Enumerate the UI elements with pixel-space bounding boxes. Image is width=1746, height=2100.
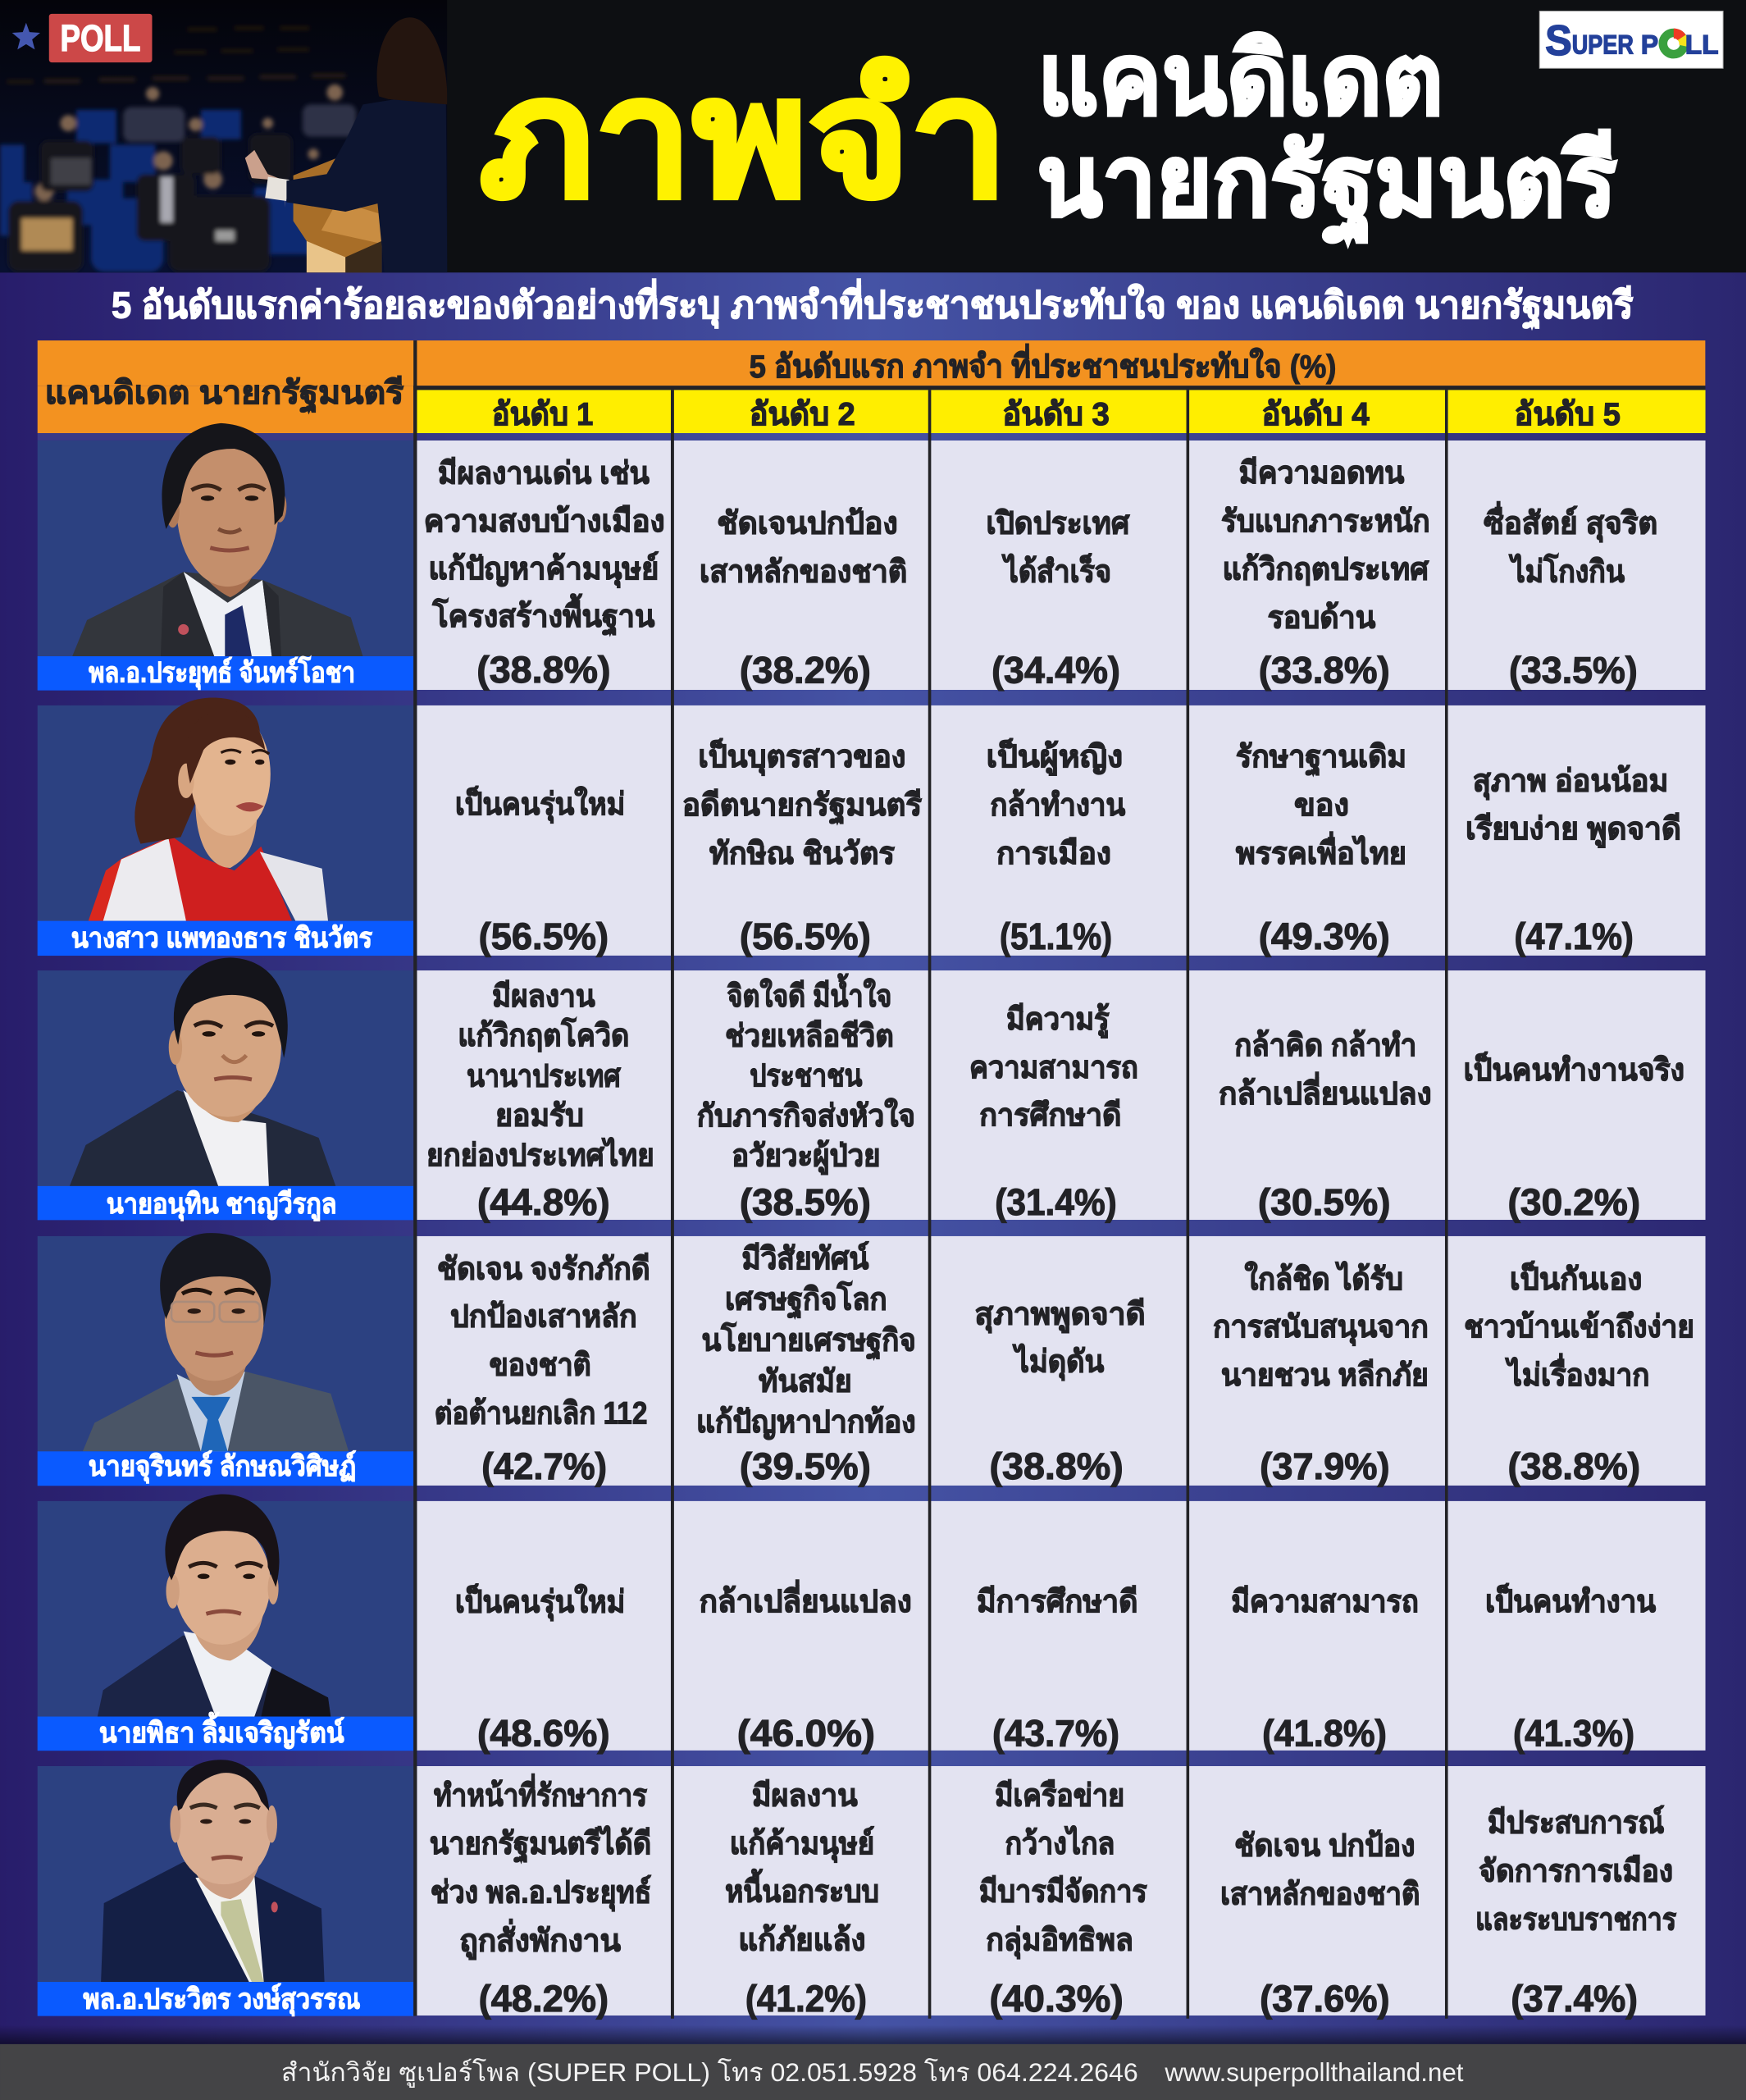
cell rank 2: กล้าเปลี่ยนแปลง [700, 1579, 912, 1618]
cell rank 4: มีความสามารถ [1231, 1584, 1419, 1618]
header: top five: 5 อันดับแรก ภาพจำ ที่ประชาชนประทับใจ (%) [750, 344, 1336, 385]
cell rank 3 [986, 505, 1130, 692]
cell rank 2: ทักษิณ ชินวัตร [709, 836, 895, 870]
cell rank 2: (56.5%) [740, 915, 871, 957]
cell rank 2: แก้ภัยแล้ง [738, 1922, 866, 1956]
cell rank 5: ชาวบ้านเข้าถึงง่าย [1464, 1309, 1694, 1344]
cell rank 2: เสาหลักของชาติ [700, 555, 907, 589]
cell rank 1 [426, 979, 654, 1223]
cell rank 3: (40.3%) [990, 1978, 1124, 2020]
cell rank 4: (41.8%) [1262, 1713, 1387, 1755]
logo: super poll: P [1641, 29, 1658, 59]
cell rank 2: อวัยวะผู้ป่วย [732, 1139, 880, 1176]
cell rank 3: กลุ่มอิทธิพล [986, 1922, 1133, 1959]
cell rank 4 [1213, 1261, 1429, 1487]
footer: www.superpollthailand.net [1164, 2058, 1464, 2087]
cell rank 2 [682, 737, 922, 957]
cell rank 1: (44.8%) [477, 1181, 610, 1223]
cell rank 4 [1220, 1828, 1420, 2020]
cell rank 1: ยอมรับ [495, 1098, 584, 1133]
cell rank 5: (30.2%) [1508, 1181, 1640, 1223]
cell rank 1: (48.6%) [477, 1713, 610, 1755]
subtitle: 5 อันดับแรกค่าร้อยละของตัวอย่างที่ระบุ ภาพจำที่ประชาชนประทับใจ ของ แคนดิเดต นายกรัฐมนตรี [112, 278, 1634, 329]
cell rank 1: โครงสร้างพื้นฐาน [431, 593, 655, 636]
name bar: พล.อ.ประยุทธ์ จันทร์โอชา [89, 656, 355, 691]
row 5 [38, 1495, 1656, 1755]
header: rank labels: อันดับ 1 [492, 397, 593, 432]
cell rank 2: เป็นบุตรสาวของ [698, 737, 906, 776]
cell rank 2: อดีตนายกรัฐมนตรี [682, 788, 922, 824]
cell rank 3: สุภาพพูดจาดี [975, 1297, 1146, 1334]
footer: สำนักวิจัย ซูเปอร์โพล (SUPER POLL) โทร 02.051.5928 โทร 064.224.2646 [281, 2058, 1138, 2088]
cell rank 3: มีการศึกษาดี [977, 1584, 1137, 1618]
portrait: pita [98, 1495, 331, 1717]
cell rank 3: (38.8%) [990, 1445, 1124, 1487]
cell rank 4: (30.5%) [1258, 1181, 1391, 1223]
cell rank 1 [424, 455, 665, 691]
name bar: นายพิธา ลิ้มเจริญรัตน์ [99, 1712, 344, 1750]
cell rank 5: มีประสบการณ์ [1488, 1805, 1664, 1839]
column dividers [413, 340, 1448, 2019]
cell rank 4: มีความอดทน [1239, 455, 1405, 490]
name bar [38, 1450, 413, 1486]
cell rank 1: (42.7%) [481, 1445, 607, 1487]
cell rank 1: นานาประเทศ [467, 1058, 622, 1093]
cell rank 4: (37.6%) [1260, 1978, 1390, 2020]
cell rank 4: กล้าเปลี่ยนแปลง [1219, 1071, 1432, 1111]
cell rank 2: แก้ปัญหาปากท้อง [696, 1404, 916, 1440]
cell rank 5 [1466, 764, 1681, 957]
cell rank 3: การเมือง [996, 836, 1111, 870]
cell rank 1: ยกย่องประเทศไทย [426, 1137, 654, 1172]
cell rank 5 [1475, 1805, 1676, 2020]
cell rank 5: ซื่อสัตย์ สุจริต [1484, 500, 1657, 542]
name bar: นายจุรินทร์ ลักษณวิศิษฏ์ [89, 1450, 356, 1484]
cell rank 4 [1231, 1584, 1419, 1755]
cell rank 5: (37.4%) [1511, 1978, 1638, 2020]
poll badge with star: POLL [60, 17, 140, 59]
cell rank 2 [697, 973, 915, 1223]
cell rank 3 [979, 1778, 1147, 2020]
footer [0, 2044, 1746, 2100]
cell rank 4: เสาหลักของชาติ [1220, 1876, 1420, 1911]
cell rank 3 [974, 1297, 1146, 1487]
cell rank 1: เป็นคนรุ่นใหม่ [455, 1583, 625, 1622]
header: candidates column: แคนดิเดต นายกรัฐมนตรี [45, 376, 403, 413]
cell rank 4: รักษาฐานเดิม [1236, 739, 1406, 776]
cell rank 4 [1236, 739, 1406, 957]
cell rank 3: มีบารมีจัดการ [979, 1874, 1147, 1908]
cell rank 3: (34.4%) [992, 650, 1120, 692]
cell rank 2: (38.5%) [740, 1181, 871, 1223]
cell rank 1: (38.8%) [476, 649, 610, 691]
cell rank 2 [700, 505, 907, 692]
cell rank 5: (38.8%) [1508, 1445, 1640, 1487]
title line 1: แคนดิเดต [1037, 24, 1443, 135]
header: rank labels: อันดับ 4 [1261, 397, 1370, 432]
cell rank 4: (33.8%) [1259, 650, 1390, 692]
table cell backgrounds [417, 441, 1706, 2016]
cell rank 1: ของชาติ [490, 1347, 591, 1381]
cell rank 4: ใกล้ชิด ได้รับ [1245, 1261, 1403, 1296]
cell rank 1 [455, 785, 625, 957]
row 6 [38, 1760, 1676, 2020]
logo: super poll [1539, 11, 1723, 68]
cell rank 3: ได้สำเร็จ [1001, 553, 1111, 589]
name bar: พล.อ.ประวิตร วงษ์สุวรรณ [83, 1983, 361, 2016]
cell rank 1: (56.5%) [479, 915, 609, 957]
cell rank 2: (39.5%) [740, 1445, 871, 1487]
cell rank 3: (51.1%) [1000, 915, 1112, 957]
portrait: prawit [101, 1760, 325, 1982]
cell rank 5: สุภาพ อ่อนน้อม [1473, 764, 1668, 801]
row 2 [38, 698, 1681, 957]
cell rank 2: มีผลงาน [752, 1778, 858, 1812]
cell rank 1: แก้ปัญหาค้ามนุษย์ [428, 551, 659, 588]
cell rank 2: ทันสมัย [759, 1363, 852, 1398]
cell rank 2: หนี้นอกระบบ [725, 1868, 879, 1908]
cell rank 3: ไม่ดุดัน [1012, 1344, 1105, 1381]
name bar [38, 1712, 413, 1751]
cell rank 2: (41.2%) [745, 1978, 867, 2020]
cell rank 5 [1464, 1260, 1694, 1487]
cell rank 4: แก้วิกฤตประเทศ [1223, 551, 1429, 586]
title line 2: นายกรัฐมนตรี [1037, 126, 1617, 247]
header: rank labels: อันดับ 5 [1514, 397, 1621, 432]
cell rank 2 [700, 1579, 912, 1755]
cell rank 3: (43.7%) [992, 1713, 1119, 1755]
cell rank 4: (49.3%) [1259, 915, 1390, 957]
cell rank 3: กล้าทำงาน [990, 788, 1126, 822]
cell rank 4 [1221, 455, 1430, 692]
cell rank 3: ความสามารถ [969, 1050, 1138, 1084]
cell rank 1: ต่อต้านยกเลิก 112 [435, 1395, 647, 1430]
cell rank 3: มีเครือข่าย [995, 1778, 1124, 1812]
cell rank 5 [1484, 500, 1657, 692]
header: rank labels: อันดับ 3 [1002, 397, 1110, 432]
header: rank labels: อันดับ 2 [750, 397, 855, 432]
table header [38, 340, 1706, 441]
cell rank 4 [1219, 1028, 1432, 1223]
cell rank 1 [435, 1252, 650, 1487]
portrait: anutin [70, 957, 335, 1186]
cell rank 5: (41.3%) [1513, 1713, 1634, 1755]
cell rank 3 [969, 1002, 1138, 1223]
cell rank 4: พรรคเพื่อไทย [1236, 831, 1406, 870]
cell rank 2: จิตใจดี มีน้ำใจ [727, 973, 891, 1013]
cell rank 5: ไม่เรื่องมาก [1505, 1353, 1649, 1392]
cell rank 3: (31.4%) [995, 1181, 1117, 1223]
cell rank 1 [455, 1583, 625, 1755]
cell rank 1: ทำหน้าที่รักษาการ [434, 1774, 647, 1813]
cell rank 5: เป็นกันเอง [1510, 1260, 1642, 1296]
cell rank 4: กล้าคิด กล้าทำ [1234, 1028, 1416, 1062]
cell rank 4: ของ [1294, 788, 1349, 822]
header: rank labels [492, 397, 1621, 432]
name bar: นายอนุทิน ชาญวีรกูล [107, 1189, 337, 1221]
cell rank 2: (46.0%) [737, 1713, 875, 1755]
cell rank 3: มีความรู้ [1006, 1002, 1110, 1039]
cell rank 3 [987, 737, 1126, 957]
cell rank 5: เป็นคนทำงาน [1485, 1582, 1656, 1618]
portrait: jurin [83, 1233, 349, 1451]
cell rank 1: (48.2%) [479, 1978, 609, 2020]
cell rank 2 [725, 1778, 879, 2020]
row 1 [38, 423, 1657, 692]
cell rank 1: มีผลงาน [492, 979, 595, 1013]
icon: star [12, 23, 40, 49]
cell rank 4: (37.9%) [1260, 1445, 1390, 1487]
cell rank 2: ประชาชน [750, 1058, 863, 1093]
cell rank 1: ปกป้องเสาหลัก [450, 1299, 637, 1333]
cell rank 4: ชัดเจน ปกป้อง [1234, 1828, 1415, 1863]
poll badge with star [12, 14, 152, 62]
title highlight: ภาพจำ [479, 45, 1008, 231]
cell rank 2: ช่วยเหลือชีวิต [725, 1019, 894, 1053]
cell rank 5: จัดการการเมือง [1479, 1854, 1673, 1888]
row 4 [38, 1233, 1694, 1487]
cell rank 1 [430, 1774, 651, 2020]
cell rank 5: เรียบง่าย พูดจาดี [1466, 811, 1681, 848]
cell rank 4: รอบด้าน [1268, 600, 1376, 634]
name bar: นางสาว แพทองธาร ชินวัตร [71, 923, 373, 954]
cell rank 5: (47.1%) [1515, 915, 1634, 957]
cell rank 3: การศึกษาดี [979, 1098, 1121, 1132]
cell rank 2 [696, 1241, 916, 1487]
cell rank 5: เป็นคนทำงานจริง [1464, 1051, 1684, 1087]
portrait: paetongtarn [89, 698, 328, 921]
header band [0, 0, 1746, 272]
cell rank 2: (38.2%) [740, 650, 871, 692]
cell rank 1: เป็นคนรุ่นใหม่ [455, 785, 625, 824]
cell rank 1: ชัดเจน จงรักภักดี [437, 1252, 650, 1286]
cell rank 2: นโยบายเศรษฐกิจ [702, 1322, 916, 1360]
cell rank 3 [977, 1584, 1137, 1755]
row 3 [38, 957, 1684, 1223]
portrait: prayut [72, 423, 362, 656]
cell rank 1: มีผลงานเด่น เช่น [438, 455, 650, 490]
cell rank 3: เป็นผู้หญิง [987, 737, 1123, 776]
cell rank 1: ช่วง พล.อ.ประยุทธ์ [431, 1874, 651, 1911]
cell rank 3: เปิดประเทศ [986, 505, 1130, 540]
logo: super poll: S [1545, 17, 1572, 65]
candidate photo backgrounds [38, 441, 413, 2016]
cell rank 2: เศรษฐกิจโลก [725, 1281, 887, 1319]
cell rank 5 [1464, 1051, 1684, 1223]
logo: super poll: UPER [1572, 29, 1634, 59]
cell rank 2: กับภารกิจส่งหัวใจ [697, 1098, 915, 1133]
cell rank 2: แก้ค้ามนุษย์ [730, 1826, 874, 1863]
cell rank 4: การสนับสนุนจาก [1213, 1309, 1429, 1346]
logo: super poll: LL [1685, 29, 1719, 59]
name bar [38, 1186, 413, 1221]
cell rank 2: มีวิสัยทัศน์ [741, 1241, 869, 1276]
cell rank 2: ชัดเจนปกป้อง [717, 505, 898, 540]
cell rank 5 [1485, 1582, 1656, 1755]
bottom shadow above footer [0, 2025, 1746, 2044]
header photo: speaker at podium [0, 0, 447, 272]
cell rank 3: กว้างไกล [1005, 1825, 1115, 1860]
cell rank 1: แก้วิกฤตโควิด [458, 1017, 629, 1052]
cell rank 5: ไม่โกงกิน [1508, 554, 1625, 589]
cell rank 4: นายชวน หลีกภัย [1221, 1358, 1429, 1392]
cell rank 1: นายกรัฐมนตรีได้ดี [430, 1825, 651, 1863]
cell rank 1: ความสงบบ้างเมือง [424, 504, 665, 538]
cell rank 4: รับแบกภาระหนัก [1221, 504, 1430, 538]
cell rank 5: (33.5%) [1509, 650, 1638, 692]
cell rank 1: ถูกสั่งพักงาน [459, 1918, 621, 1960]
cell rank 5: และระบบราชการ [1475, 1902, 1676, 1937]
